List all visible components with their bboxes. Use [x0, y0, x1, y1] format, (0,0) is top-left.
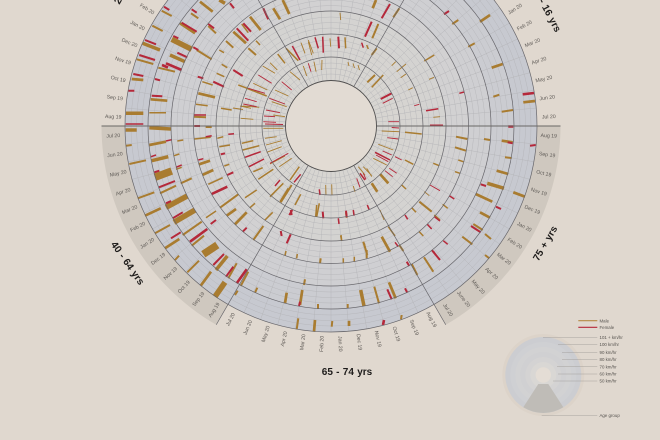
month labels: Jul 20	[225, 312, 237, 327]
month labels: Apr 20	[484, 266, 499, 281]
legend: speed labels: 70 km/hr	[600, 364, 617, 369]
month labels: Jan 20	[516, 221, 532, 234]
age group bands	[102, 126, 560, 325]
legend: male key: Male	[600, 318, 610, 323]
month labels: Apr 20	[280, 331, 289, 347]
month labels: Jan 20	[139, 237, 156, 251]
month labels: Jan 20	[507, 3, 524, 16]
month labels: Jun 20	[243, 319, 254, 336]
month labels: Aug 19	[208, 302, 222, 319]
legend: speed labels: 80 km/hr	[600, 357, 617, 362]
month labels: Sep 19	[192, 291, 206, 308]
month labels: May 20	[535, 75, 553, 84]
month labels: Mar 20	[299, 334, 307, 351]
month labels: Sep 19	[106, 94, 123, 102]
month labels: Feb 20	[138, 3, 155, 16]
month labels: Nov 19	[373, 330, 382, 348]
age label: 40 - 64 yrs: 40 - 64 yrs	[108, 240, 146, 288]
centre hole	[286, 80, 376, 172]
legend: speed labels: 101 + km/hr	[600, 335, 623, 340]
legend	[502, 318, 623, 418]
major rings	[125, 0, 537, 332]
age label: 75 + yrs: 75 + yrs	[531, 224, 560, 263]
age label: 65 - 74 yrs: 65 - 74 yrs	[322, 367, 373, 378]
month labels: Aug 19	[105, 114, 122, 121]
month labels: Nov 19	[163, 266, 179, 282]
month labels: Dec 19	[355, 334, 363, 351]
legend: speed labels: 50 km/hr	[600, 379, 617, 384]
month labels: Feb 20	[129, 221, 147, 234]
month labels: Sep 19	[408, 319, 420, 337]
month labels: Feb 20	[319, 336, 326, 352]
radial chart	[102, 0, 560, 332]
legend: leader lines	[542, 337, 597, 415]
month labels	[105, 3, 557, 352]
month labels: Oct 19	[110, 75, 126, 84]
legend: speed labels	[600, 335, 623, 418]
month labels: Jun 20	[107, 151, 123, 159]
month labels: Nov 19	[114, 56, 132, 67]
month labels: Oct 19	[391, 326, 401, 342]
month labels: Jul 20	[542, 114, 556, 121]
month labels: Nov 19	[530, 187, 548, 198]
month labels: Aug 19	[424, 311, 437, 329]
legend: speed labels: 90 km/hr	[600, 350, 617, 355]
month labels: Jan 20	[129, 20, 146, 32]
month labels: May 20	[470, 279, 486, 296]
month labels: Dec 19	[150, 252, 167, 267]
month labels: Feb 20	[516, 20, 533, 32]
legend: speed labels: 60 km/hr	[600, 372, 617, 377]
light grid	[126, 0, 536, 332]
month labels: Apr 20	[531, 56, 547, 66]
month labels: Aug 19	[540, 133, 557, 140]
month labels: Mar 20	[121, 204, 139, 216]
legend: female key: Female	[600, 325, 615, 330]
month labels: Jul 20	[441, 303, 454, 318]
month labels: Mar 20	[495, 252, 512, 267]
month labels: Oct 19	[177, 280, 192, 295]
month labels: Dec 20	[121, 37, 138, 49]
month labels: Sep 19	[538, 151, 556, 159]
sector dividers	[102, 0, 560, 325]
male bars	[126, 0, 535, 332]
month labels: Mar 20	[524, 37, 541, 49]
month labels: Jun 20	[539, 94, 555, 102]
month labels: Jul 20	[106, 133, 120, 140]
month labels: Jan 20	[336, 336, 343, 352]
month labels: May 20	[109, 169, 127, 179]
legend: speed labels: 100 km/hr	[600, 342, 620, 347]
month labels: Dec 19	[523, 204, 541, 216]
month labels: June 20	[455, 290, 471, 309]
month labels: May 20	[261, 325, 272, 343]
female bars	[126, 3, 536, 325]
speed rings	[125, 0, 537, 332]
month labels: Oct 19	[536, 169, 552, 179]
month labels: Apr 20	[115, 187, 132, 197]
legend: speed labels: Age group	[600, 413, 620, 418]
legend: ring diagram	[502, 334, 584, 416]
month labels: Feb 20	[506, 237, 523, 251]
